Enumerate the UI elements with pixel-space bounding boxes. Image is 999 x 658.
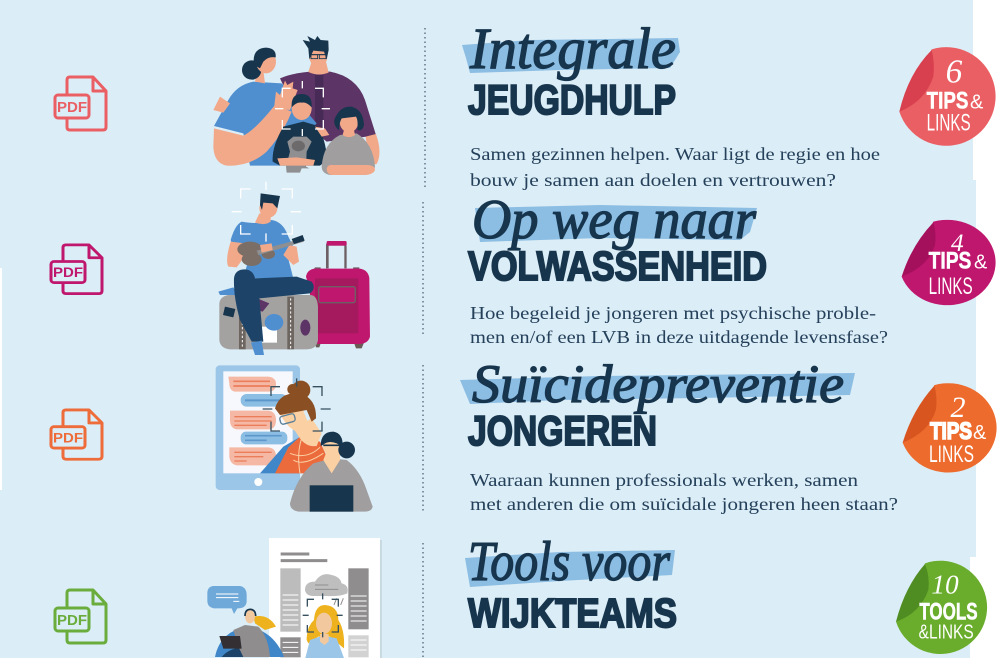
title: Op weg naar volwassenheid: VOLWASSENHEID [468, 243, 767, 289]
title: Suïcidepreventie jongeren: JONGEREN [468, 407, 657, 454]
illustration: family [213, 36, 379, 175]
text: description [470, 470, 898, 514]
badge: 4 tips & links: 4 [951, 229, 964, 257]
illustration: young man with ukulele and suitcases [218, 182, 370, 355]
illustration: tablet chat and two women [216, 365, 373, 512]
text: description: bouw je samen aan doelen en vertrouwen? [470, 170, 836, 190]
title: Tools voor wijkteams [465, 531, 677, 636]
icon: PDF document [51, 410, 102, 459]
icon: PDF document [55, 590, 106, 643]
title: Tools voor wijkteams: WIJKTEAMS [468, 590, 677, 636]
text: description: Waaraan kunnen professionals werken, samen [470, 470, 858, 490]
title: Op weg naar volwassenheid: Op weg naar [472, 189, 756, 251]
badge: 6 tips & links: LINKS [927, 110, 971, 137]
text: description [470, 303, 888, 347]
icon: PDF document: PDF [53, 431, 83, 446]
title: Op weg naar volwassenheid [468, 189, 767, 289]
section: Tools voor wijkteams [55, 531, 987, 658]
badge text: 2 tips & links: & [973, 422, 987, 444]
badge: 10 tools & links [896, 561, 987, 654]
text: description: met anderen die om suïcidale jongeren heen staan? [470, 494, 898, 514]
badge: 6 tips & links [899, 47, 996, 146]
badge: 4 tips & links: & [974, 251, 988, 273]
section: Integrale jeugdhulp [55, 16, 996, 190]
icon: PDF document: PDF [57, 99, 87, 116]
title: Tools voor wijkteams: Tools voor [468, 531, 670, 593]
section: Op weg naar volwassenheid [51, 182, 996, 355]
text: description: men en/of een LVB in deze uitdagende levensfase? [470, 327, 888, 347]
badge: 10 tools & links: 10 [931, 569, 959, 599]
badge: 2 tips & links [903, 383, 997, 473]
icon: PDF document: PDF [53, 266, 83, 281]
badge: 6 tips & links: & [970, 91, 984, 113]
title: Integrale jeugdhulp: JEUGDHULP [468, 76, 676, 123]
badge: 10 tools & links: &LINKS [919, 621, 974, 643]
badge: 4 tips & links: TIPS [929, 247, 971, 274]
title: Integrale jeugdhulp [462, 16, 680, 123]
icon: PDF document [55, 77, 106, 130]
section: Suïcidepreventie jongeren [51, 354, 997, 514]
badge text: 2 tips & links: TIPS [930, 418, 972, 445]
badge text: 2 tips & links: LINKS [929, 441, 974, 468]
title: Integrale jeugdhulp: Integrale [469, 16, 676, 81]
badge: 4 tips & links: LINKS [929, 273, 973, 300]
badge text: 2 tips & links: 2 [950, 391, 966, 424]
badge: 6 tips & links: 6 [946, 54, 963, 91]
title: Suïcidepreventie jongeren [460, 354, 855, 454]
icon: PDF document [51, 245, 102, 294]
text: description: Samen gezinnen helpen. Waar ligt de regie en hoe [470, 144, 880, 164]
text: description [470, 144, 880, 190]
badge: 6 tips & links: TIPS [927, 87, 968, 114]
illustration: report and woman with laptop [207, 538, 382, 658]
icon: PDF document: PDF [57, 612, 87, 629]
text: description: Hoe begeleid je jongeren met psychische proble- [470, 303, 876, 323]
title: Suïcidepreventie jongeren: Suïcidepreventie [472, 354, 844, 414]
badge text: 2 tips & links [929, 391, 987, 468]
badge: 4 tips & links [902, 220, 996, 305]
